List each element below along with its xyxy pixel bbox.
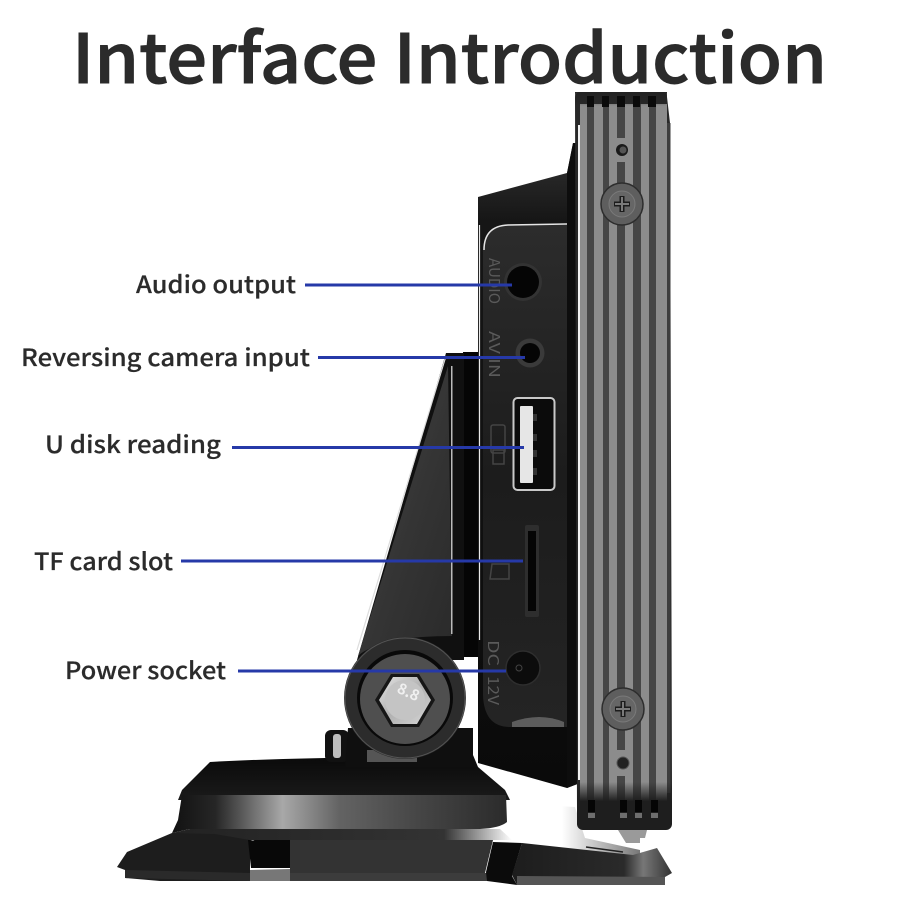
base metallic band (172, 795, 507, 833)
bottom hole (617, 750, 629, 776)
top screw (601, 183, 643, 225)
TF card slot (525, 525, 539, 617)
base white reflective plate (510, 802, 640, 860)
front display panel (575, 92, 672, 843)
port engravings: AV IN (484, 331, 505, 378)
AV IN jack (516, 338, 544, 368)
callout: audio output: Audio output (136, 265, 297, 300)
housing white edge (478, 225, 480, 640)
top hole (616, 138, 628, 162)
device rear housing (478, 143, 580, 788)
neck (345, 728, 478, 767)
callout: reversing camera input: Reversing camera input (21, 338, 311, 373)
bolt: 8.8 (394, 677, 423, 706)
pivot hub (344, 637, 466, 759)
mount base (117, 730, 672, 885)
housing dark divider next to panel (567, 143, 580, 788)
title: Interface Introduction (72, 4, 827, 103)
band shadow fading to the plate (172, 829, 512, 840)
bottom vent teeth (577, 782, 672, 843)
TF symbol mark (490, 564, 509, 579)
USB port (514, 398, 554, 490)
device illustration: side view with ports and stand (117, 92, 672, 885)
callout: U disk reading: U disk reading (45, 425, 221, 460)
port side panel (483, 224, 567, 727)
callout: power socket: Power socket (65, 651, 227, 686)
top vent teeth (575, 92, 667, 107)
USB symbol mark (491, 425, 505, 464)
bottom screw (602, 688, 644, 730)
port engravings: AUDIO (484, 258, 505, 304)
port engravings: 12V (483, 676, 504, 705)
knob (325, 730, 349, 762)
audio jack (504, 263, 542, 301)
stand arm (344, 352, 478, 767)
base flange (117, 829, 672, 885)
port engravings (483, 258, 505, 705)
DC power socket (506, 651, 540, 685)
port engravings: DC (483, 640, 504, 667)
callout: TF card slot: TF card slot (34, 542, 174, 577)
base dome (178, 757, 510, 800)
panel stripes (580, 104, 667, 804)
